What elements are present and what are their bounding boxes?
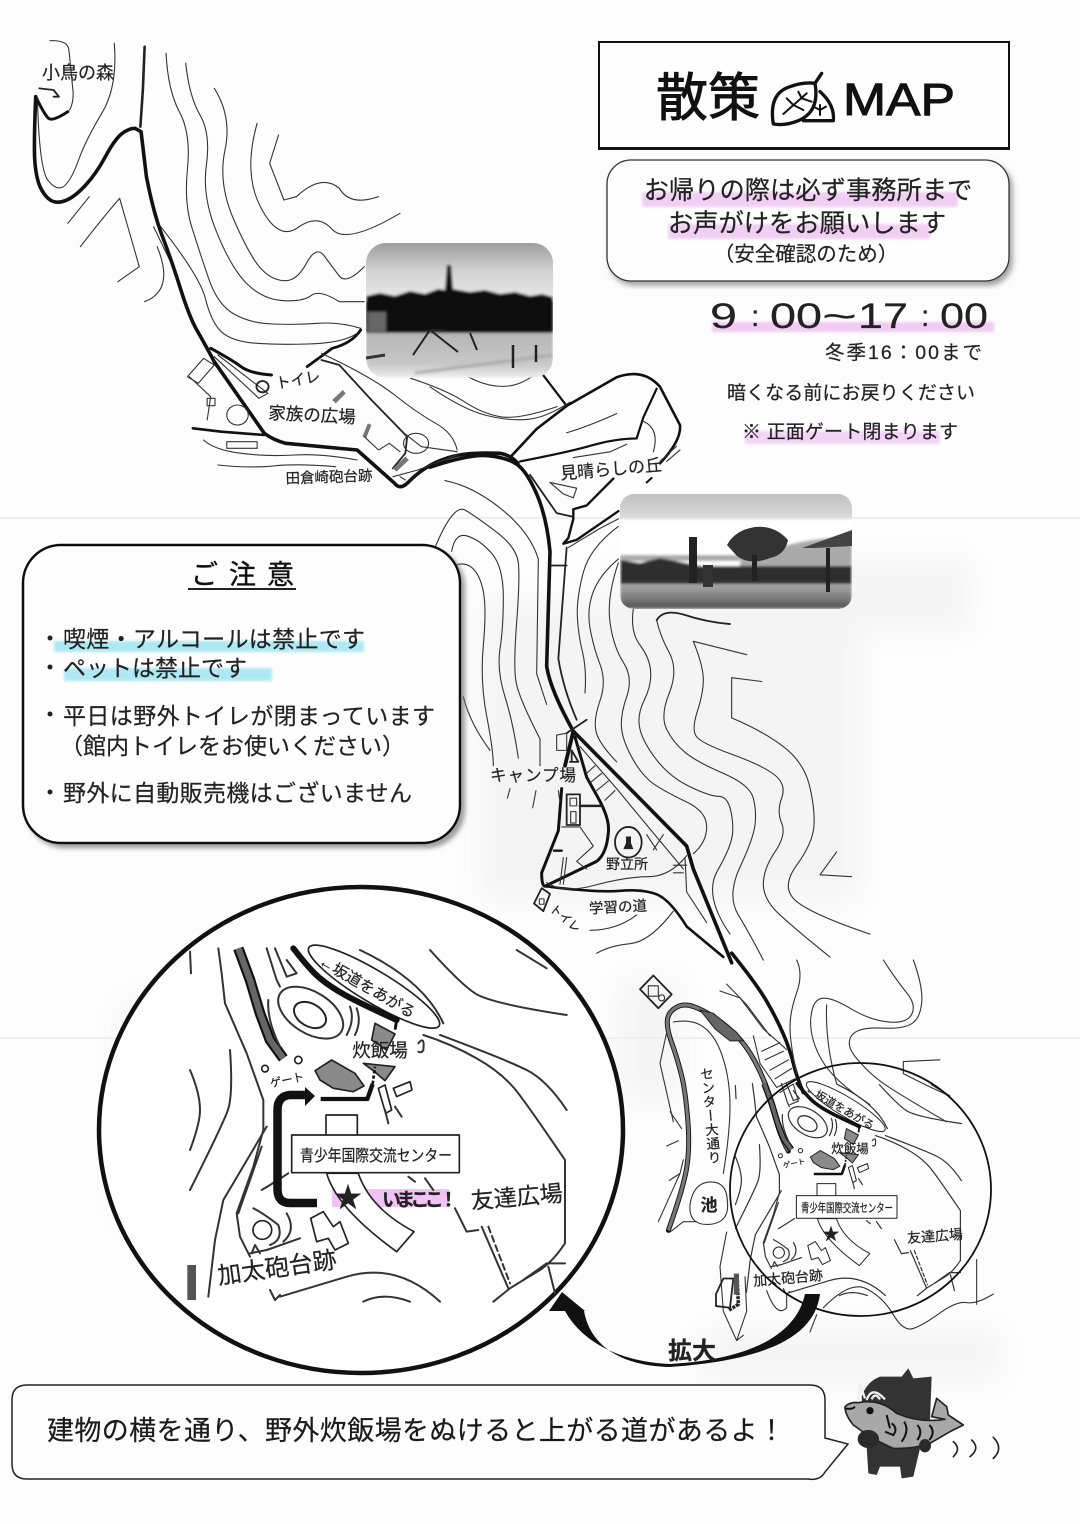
- highlights: [54, 641, 364, 681]
- notice text line 3: （安全確認のため）: [714, 243, 898, 266]
- hours text: 00: [770, 297, 822, 336]
- label: cooking area: 炊飯場: [352, 1040, 408, 1061]
- label: learning path: 学習の道: [589, 897, 647, 918]
- label: friends plaza: 友達広場: [470, 1180, 564, 1214]
- small circle outline: [730, 1063, 991, 1316]
- motion marks: [953, 1437, 999, 1458]
- caution panel: [23, 545, 460, 843]
- rule: no vending machines: 野外に自動販売機はございません: [63, 780, 412, 806]
- highlights: [642, 192, 958, 239]
- label: campsite: キャンプ場: [490, 766, 576, 785]
- main trail map: south section (センター大通り): [640, 953, 993, 1341]
- opening hours: [710, 297, 994, 444]
- fish eye: [866, 1407, 874, 1414]
- label: viewpoint hill: 見晴らしの丘: [559, 456, 663, 483]
- bullets: [48, 636, 52, 794]
- mascot: boar holding a fish: [845, 1368, 963, 1478]
- label: gate: ゲート: [269, 1071, 305, 1090]
- boar head and body: [862, 1368, 932, 1478]
- arrow: route to the slope: [278, 1087, 317, 1203]
- title: MAP: MAP: [843, 74, 955, 125]
- label: slope: ←坂道をあがる: [803, 1082, 877, 1132]
- small circle: map overview of the centre area: [730, 1063, 991, 1316]
- icon: star: ★: [334, 1182, 362, 1213]
- hours text: 9: [710, 297, 737, 336]
- label: gate: ゲート: [782, 1157, 806, 1170]
- label: cooking area: 炊飯場: [831, 1141, 869, 1156]
- arrow: enlargement: [549, 1292, 820, 1367]
- label: slope: ←坂道をあがる: [316, 952, 418, 1022]
- main trail map: north section (小鳥の森 to 家族の広場): [34, 41, 557, 487]
- label: toilet south: トイレ: [547, 902, 584, 935]
- rule: use indoor toilets: （館内トイレをお使いください）: [60, 733, 405, 759]
- fish body: [845, 1398, 963, 1448]
- return before dark: 暗くなる前にお戻りください: [727, 382, 975, 404]
- label: youth centre: 青少年国際交流センター: [300, 1147, 452, 1165]
- label: bird forest: 小鳥の森: [42, 63, 114, 83]
- winter hours: 冬季16：00まで: [825, 342, 982, 364]
- title box: [598, 42, 1010, 150]
- bubble text: 建物の横を通り、野外炊飯場をぬけると上がる道があるよ！: [47, 1416, 785, 1446]
- rule: outdoor toilets closed on weekdays: 平日は野外トイレが閉まっています: [63, 703, 435, 729]
- photo: viewpoint hill: [620, 494, 852, 609]
- notice text line 1: お帰りの際は必ず事務所まで: [644, 177, 972, 205]
- hours text: 17: [858, 297, 908, 336]
- label: pond: 池: [700, 1196, 718, 1215]
- map labels: [42, 63, 663, 935]
- label: you are here: いまここ！: [382, 1190, 458, 1211]
- boar ear and face mark: [858, 1384, 885, 1402]
- hours text: :: [921, 300, 929, 333]
- label: family plaza: 家族の広場: [268, 403, 356, 427]
- caution heading: ご注意: [191, 560, 305, 590]
- circle fill and outline: [99, 887, 623, 1373]
- fish markings: [845, 1407, 933, 1442]
- label: youth centre: 青少年国際交流センター: [801, 1201, 893, 1215]
- highlight: you are here: [332, 1189, 449, 1207]
- hours text: [710, 297, 988, 336]
- icon: leaf: [772, 73, 833, 125]
- title: walk: 散策: [656, 70, 760, 128]
- photo: family plaza: [360, 240, 560, 378]
- hours text: ~: [822, 297, 857, 336]
- notice text line 2: お声がけをお願いします: [668, 210, 946, 238]
- magnified map line art: [187, 934, 567, 1302]
- speech bubble: [12, 1385, 848, 1479]
- hours text: 00: [940, 297, 988, 336]
- notice panel: [607, 160, 1009, 281]
- label: friends plaza: 友達広場: [906, 1226, 963, 1246]
- icon: star: ★: [822, 1225, 840, 1244]
- rule: no pets: ペットは禁止です: [63, 655, 247, 681]
- label: toilet: トイレ: [274, 368, 322, 393]
- label: Kada battery: 加太砲台跡: [752, 1267, 824, 1289]
- rule: no smoking or alcohol: 喫煙・アルコールは禁止です: [63, 626, 365, 652]
- vertical label: center avenue: センター大通り: [698, 1066, 722, 1165]
- label: Nodachi area: 野立所: [606, 856, 648, 872]
- gate closing note: ※ 正面ゲート閉まります: [742, 421, 958, 443]
- hours text: :: [751, 300, 759, 333]
- paws: [858, 1430, 931, 1452]
- small circle line art: [734, 1075, 961, 1296]
- label: enlarge: 拡大: [668, 1338, 716, 1365]
- magnified circle: [99, 887, 623, 1373]
- label: Tagurazaki battery: 田倉崎砲台跡: [285, 467, 373, 488]
- main trail map: central section (見晴らしの丘 to 野立所): [430, 374, 870, 963]
- label: Kada battery: 加太砲台跡: [216, 1247, 338, 1290]
